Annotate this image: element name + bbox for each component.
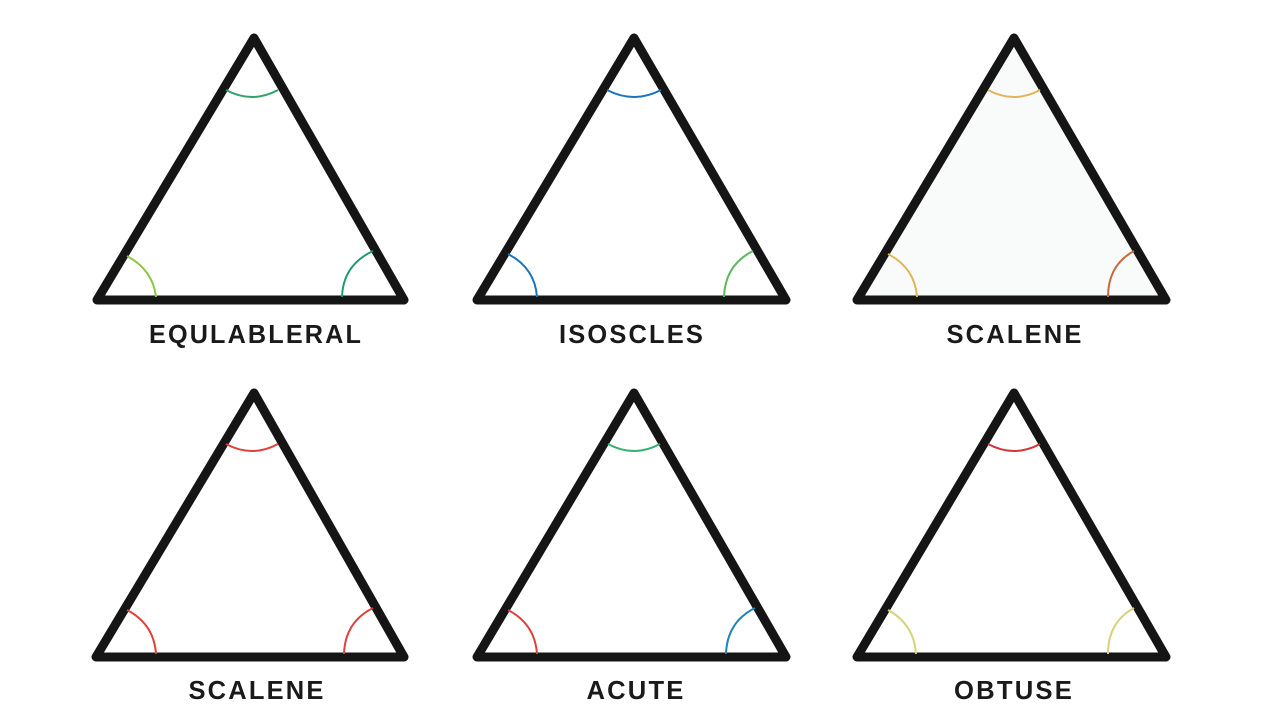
label: SCALENE [188, 675, 326, 705]
triangle outline [97, 38, 404, 300]
triangle outline [477, 38, 786, 300]
panel: obtuse [857, 393, 1166, 705]
label: ACUTE [586, 675, 686, 705]
angle arcs [888, 444, 1134, 654]
angle arcs [127, 90, 373, 297]
triangle outline [96, 393, 404, 657]
panel: equilateral [97, 38, 404, 349]
label: ISOSCLES [559, 319, 705, 349]
triangle outline [857, 393, 1166, 657]
panel: scalene bottom [96, 393, 404, 705]
angle arcs [127, 444, 373, 654]
panel: scalene top [857, 38, 1166, 349]
angle arcs [888, 90, 1134, 297]
label: EQULABLERAL [149, 319, 363, 349]
angle arcs [508, 90, 753, 297]
angle arcs [508, 444, 755, 654]
panel: isosceles [477, 38, 786, 349]
label: SCALENE [946, 319, 1084, 349]
panel: acute [477, 393, 786, 705]
label: OBTUSE [954, 675, 1074, 705]
triangle outline [477, 393, 786, 657]
triangle outline [857, 38, 1166, 300]
